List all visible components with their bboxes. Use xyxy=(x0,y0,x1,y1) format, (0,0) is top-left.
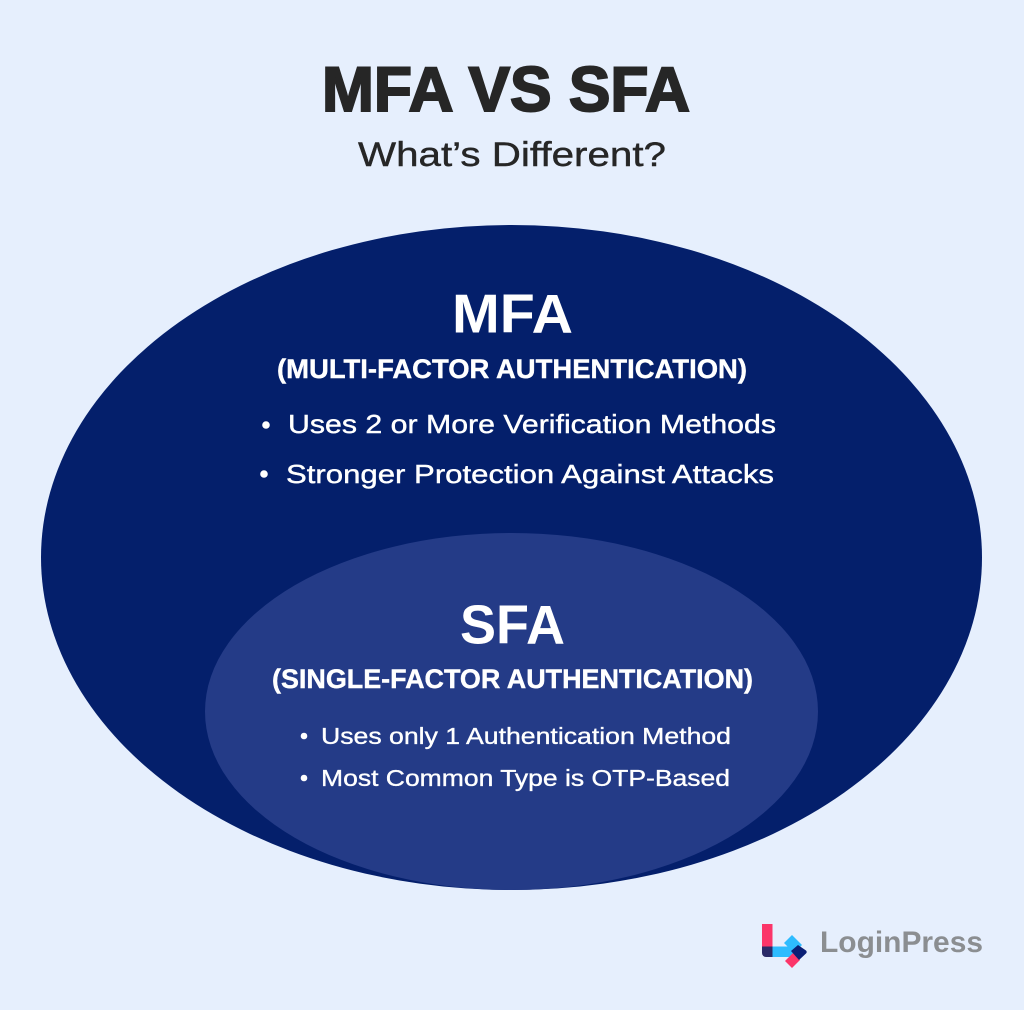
SFA bullet 1: Uses only 1 Authentication Method xyxy=(321,723,731,749)
wordmark: LoginPress xyxy=(820,926,983,959)
MFA bullet 1: Uses 2 or More Verification Methods xyxy=(288,409,776,439)
logo: LoginPress xyxy=(762,924,983,968)
subtitle: What’s Different? xyxy=(358,136,666,174)
icon: LoginPress mark xyxy=(762,924,807,968)
MFA bullet 2: Stronger Protection Against Attacks xyxy=(286,459,774,489)
heading: SFA: SFA xyxy=(460,594,565,656)
heading: MFA: MFA xyxy=(452,282,573,344)
panel: SFA inner ellipse xyxy=(205,533,818,890)
subheading: multi-factor authentication: (MULTI-FACTOR AUTHENTICATION) xyxy=(277,354,747,384)
title: MFA VS SFA xyxy=(322,55,690,125)
subheading: single-factor authentication: (SINGLE-FACTOR AUTHENTICATION) xyxy=(272,664,753,694)
SFA bullet 2: Most Common Type is OTP-Based xyxy=(321,765,730,791)
panel: MFA outer ellipse xyxy=(41,225,982,890)
